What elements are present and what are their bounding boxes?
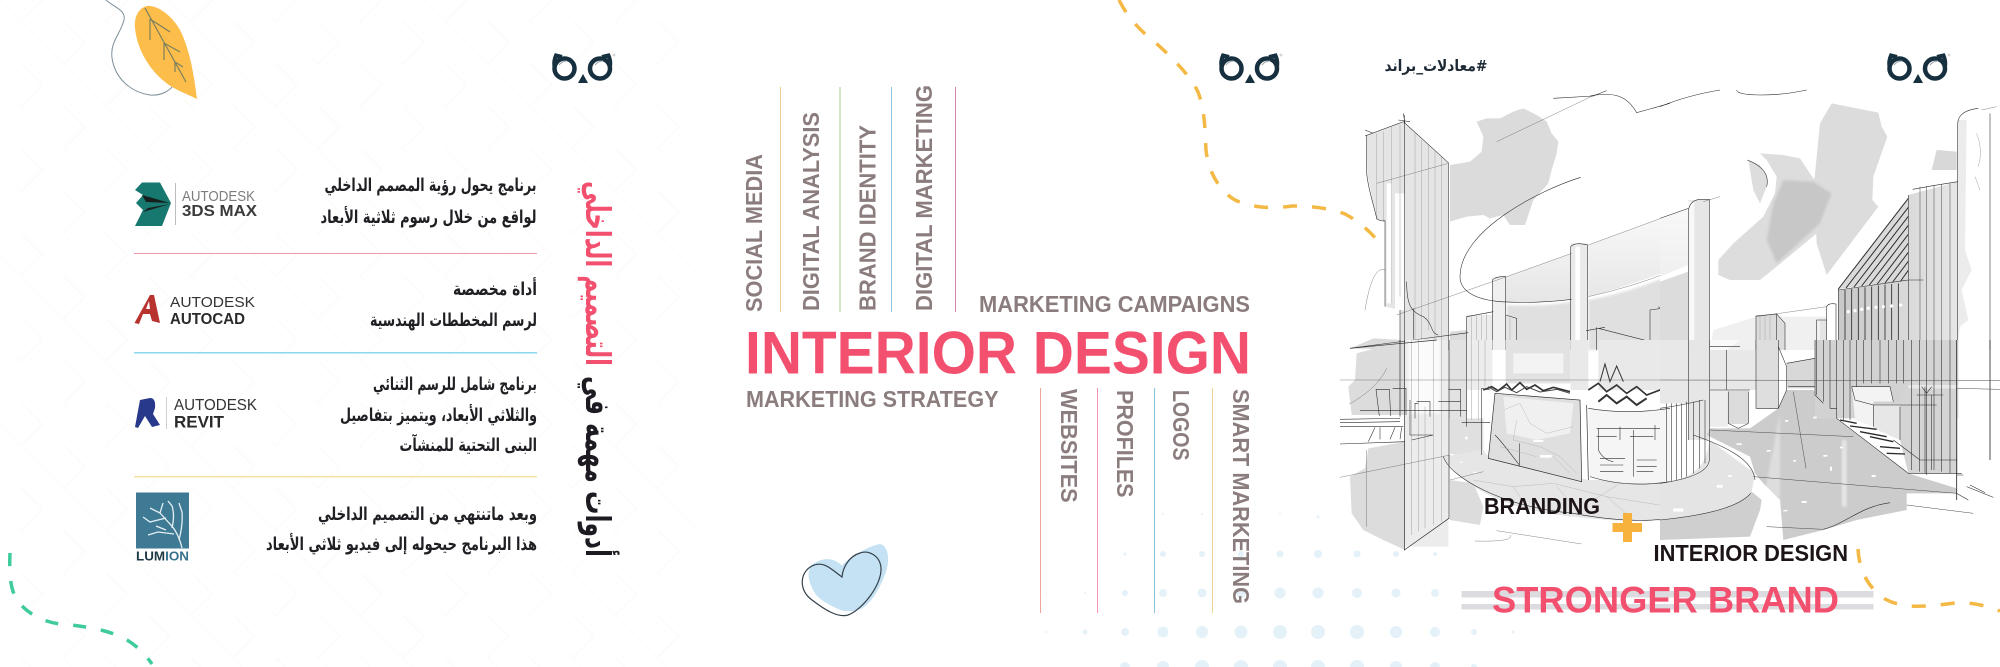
chart: lower tag lines [1040,388,1213,613]
tool row: Revit [135,374,537,456]
text: Lumion description [266,504,537,555]
text: upper vertical tags [741,85,937,312]
text: upper vertical tags: SOCIAL MEDIA [741,154,767,312]
text: Revit description: والثلاثي الأبعاد، ويتميز بتفاصيل [340,404,537,426]
text: Lumion description: هذا البرنامج حيحوله إلى فيديو ثلاثي الأبعاد [266,533,537,555]
text: AutoCAD description: أداة مخصصة [453,277,537,300]
text: marketing strategy: MARKETING STRATEGY [746,386,998,412]
tool row: Revit: REVIT [174,412,225,431]
text: Revit description [340,374,537,456]
tool row: Revit: AUTODESK [174,397,257,414]
text: branding: BRANDING [1484,493,1600,519]
sketch: lower left washes, counter and furniture [1340,340,1670,550]
tool row: AutoCAD [134,277,537,331]
icon: 3DS Max logo [135,182,171,226]
decoration: yellow dashed curve bottom [1858,549,2000,611]
decorative halftone dots [1045,513,1514,667]
panel: tools [10,0,620,664]
chart: upper tag lines [780,87,956,312]
logo: owl right [1889,54,1950,83]
sketch: upper right washes, wall and pillars [1660,90,1997,350]
decoration: yellow dashed curve [1119,0,1381,245]
title: interior design: INTERIOR DESIGN [745,320,1251,386]
title: rotated Arabic heading: أدوات مهمة في [577,376,620,557]
text: upper vertical tags: BRAND IDENTITY [854,125,880,311]
panel: word cloud [741,0,1381,616]
icon: heart [802,544,888,616]
decoration: green dashed curve [10,553,152,664]
logo: owl middle [1221,54,1282,83]
text: 3DS Max description [320,175,536,228]
title: rotated Arabic heading: التصميم الداخلي [577,181,617,366]
tool row: 3DS Max: 3DS MAX [182,203,257,220]
tool row: Lumion [136,492,537,564]
text: lower vertical tags: LOGOS [1168,390,1194,460]
logo: owl left [554,54,616,83]
tool row: AutoCAD: AUTODESK [170,294,255,311]
title: stronger brand: STRONGER BRAND [1492,578,1839,620]
sketch: lower right floor and booth [1660,340,2000,540]
icon: Lumion logo [136,492,189,564]
text: hashtag: #معادلات_براند [1384,57,1488,75]
icon: Lumion logo: LUMION [136,550,189,564]
text: interior design subtitle: INTERIOR DESIGN [1654,540,1848,566]
text: lower vertical tags [1056,389,1254,604]
text: upper vertical tags: DIGITAL MARKETING [911,85,937,311]
icon: plus sign [1612,513,1642,542]
text: AutoCAD description: لرسم المخططات الهندسية [370,310,537,331]
text: lower vertical tags: WEBSITES [1056,389,1082,503]
text: lower vertical tags: SMART MARKETING [1228,389,1254,604]
tool row: AutoCAD: AUTOCAD [170,311,245,328]
panel: branding sketch [1340,54,2000,620]
text: AutoCAD description [370,277,537,331]
text: marketing campaigns: MARKETING CAMPAIGNS [979,291,1250,317]
text: 3DS Max description: برنامج يحول رؤية المصمم الداخلي [324,175,536,196]
sketch: upper left washes and column [1350,91,1670,350]
text: lower vertical tags: PROFILES [1112,390,1138,498]
tool row: 3DS Max: AUTODESK [182,189,255,205]
text: 3DS Max description: لواقع من خلال رسوم ثلاثية الأبعاد [320,206,536,228]
text: upper vertical tags: DIGITAL ANALYSIS [798,112,824,311]
tool row: 3DS Max [135,175,536,228]
text: Lumion description: وبعد ماتنتهي من التصميم الداخلي [318,504,537,525]
icon: leaf [106,0,197,99]
icon: Revit logo [135,398,160,428]
illustration: interior sketch [1340,90,2000,550]
icon: AutoCAD logo [134,295,160,324]
text: Revit description: برنامج شامل للرسم الثنائي [373,374,537,395]
title: rotated Arabic heading [577,181,620,557]
text: Revit description: البنى التحتية للمنشآت [400,433,537,456]
